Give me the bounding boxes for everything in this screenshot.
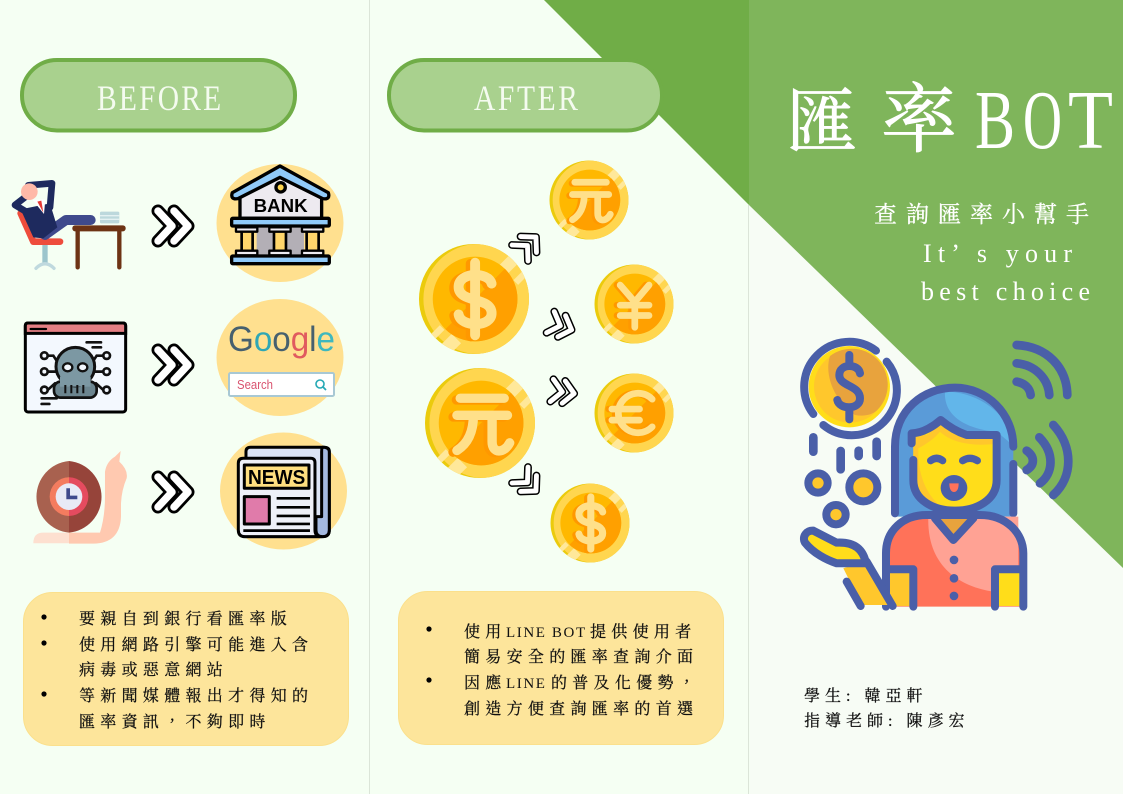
subtitle	[874, 202, 1098, 306]
heading: BEFORE pill	[22, 60, 295, 130]
text box: before bullets: 要親自到銀行看匯率版	[79, 610, 292, 628]
subtitle: 查詢匯率小幫手	[874, 202, 1098, 227]
icon: relaxing businessman at desk	[15, 183, 126, 268]
illustration: woman with coin and signals	[804, 342, 1068, 607]
heading: AFTER pill: AFTER	[474, 79, 581, 119]
credits: 學生: 韓亞軒	[804, 687, 927, 705]
cover panel background	[750, 0, 1123, 794]
icon: bank on yellow circle: BANK	[254, 195, 308, 216]
panel: after	[389, 60, 724, 744]
panel: cover	[787, 74, 1113, 730]
coin: small dollar	[550, 484, 633, 565]
coin: large dollar	[419, 244, 533, 357]
arrow: row 3	[158, 477, 188, 507]
text box: after bullets: 創造方便查詢匯率的首選	[464, 700, 698, 718]
text box: after bullets: 使用	[464, 623, 507, 641]
coin: euro	[594, 374, 677, 455]
subtitle: best choice	[921, 277, 1090, 306]
panel: before	[15, 60, 348, 746]
arrow: to euro	[550, 379, 576, 405]
text box: before bullets: 使用網路引擎可能進入含	[79, 636, 313, 654]
arrow: to yen	[547, 312, 575, 340]
icon: newspaper on yellow circle	[220, 432, 347, 550]
icon: google search on yellow circle: Search	[237, 378, 273, 392]
text box: before bullets	[24, 592, 348, 746]
coin: small yuan	[550, 160, 632, 242]
text box: after bullets: 提供使用者	[590, 622, 697, 641]
text box: after bullets: LINE	[506, 676, 547, 692]
title: 匯	[787, 85, 857, 162]
coin: large yuan	[425, 368, 539, 481]
text box: before bullets: 匯率資訊，不夠即時	[79, 713, 271, 731]
title: T	[1068, 74, 1113, 167]
icon: google search on yellow circle: Google	[228, 320, 335, 359]
heading: AFTER pill	[389, 60, 662, 130]
icon: newspaper on yellow circle: NEWS	[248, 467, 305, 489]
title: 率	[881, 79, 957, 163]
text box: after bullets: 的普及化優勢，	[551, 674, 700, 692]
arrow: row 2	[158, 350, 188, 380]
title: B	[975, 74, 1015, 167]
credits	[804, 687, 969, 730]
credits: 指導老師: 陳彥宏	[804, 712, 969, 730]
subtitle: It’ s your	[923, 239, 1072, 268]
heading: BEFORE pill: BEFORE	[97, 79, 223, 119]
text box: before bullets: 病毒或惡意網站	[79, 661, 228, 679]
text box: after bullets: LINE BOT	[506, 625, 587, 641]
arrow: to yuan	[512, 229, 544, 261]
icon: malware skull window	[25, 323, 126, 412]
text box: after bullets: 簡易安全的匯率查詢介面	[464, 648, 698, 666]
green diagonal band	[544, 0, 1123, 568]
title	[787, 74, 1113, 167]
icon: clock snail	[33, 451, 127, 544]
text box: after bullets: 因應	[464, 674, 507, 692]
title: O	[1023, 74, 1062, 167]
icon: bank on yellow circle	[216, 164, 344, 282]
icon: google search on yellow circle	[216, 299, 344, 416]
arrow: row 1	[158, 211, 188, 241]
text box: after bullets	[398, 592, 724, 744]
coin: yen	[594, 264, 677, 346]
arrow: to dollar	[512, 467, 544, 499]
text box: before bullets: 等新聞媒體報出才得知的	[79, 686, 313, 705]
